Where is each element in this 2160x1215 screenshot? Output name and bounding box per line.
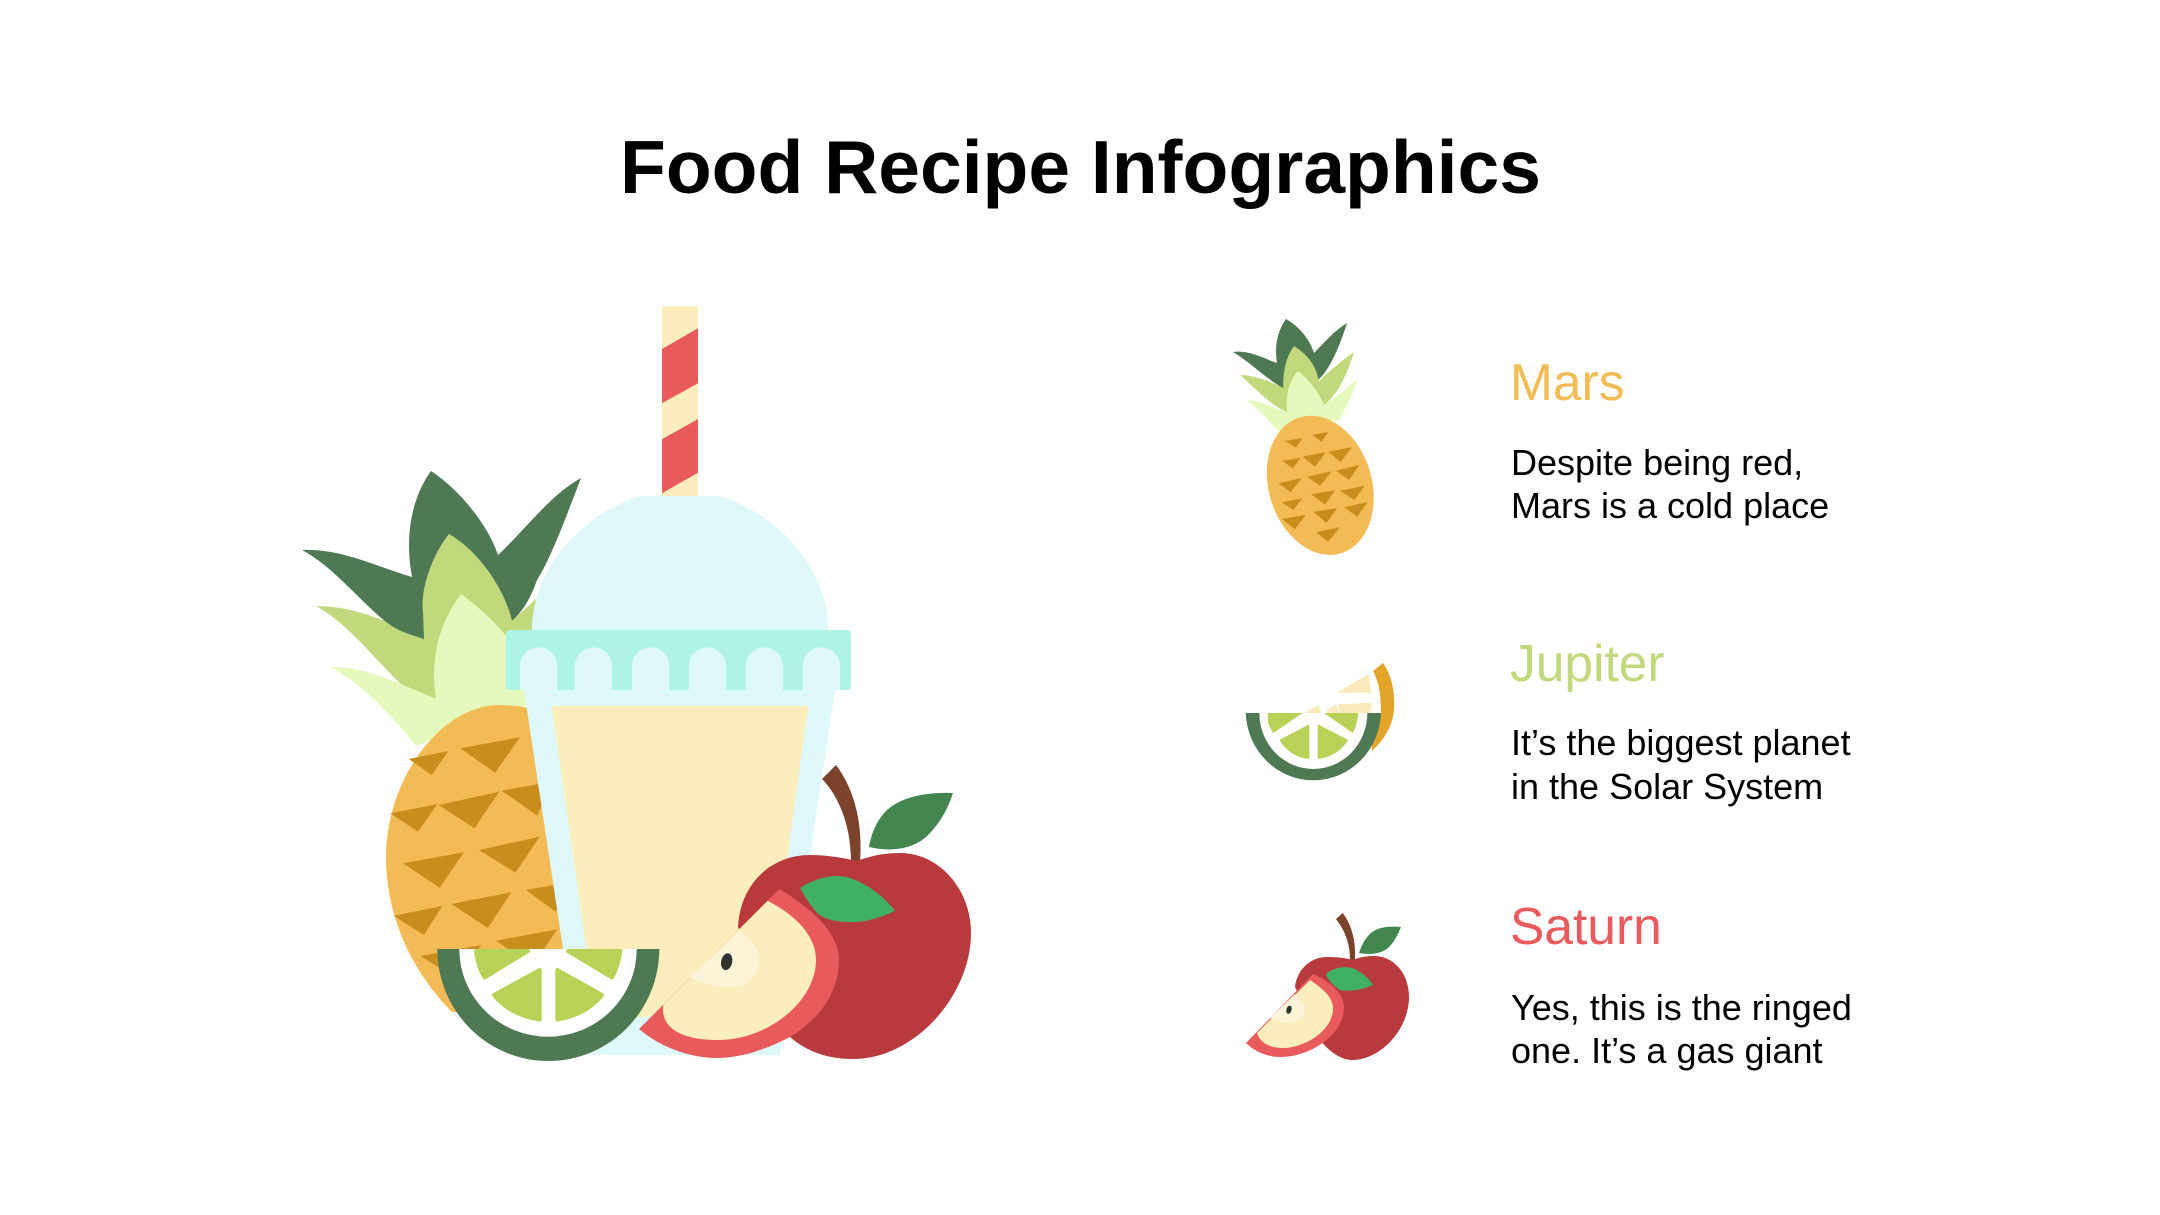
heading: Mars: Mars (1510, 353, 1624, 411)
icon: apple (1246, 913, 1409, 1060)
text: Saturn description: one. It’s a gas giant (1511, 1030, 1823, 1071)
heading: Jupiter: Jupiter (1510, 634, 1665, 692)
cup (524, 690, 835, 1055)
lime slice (437, 949, 659, 1061)
pineapple (302, 471, 600, 1012)
text: Mars description: Mars is a cold place (1511, 485, 1829, 526)
text: Saturn description: Yes, this is the ringed (1511, 987, 1852, 1028)
title: Food Recipe Infographics (620, 125, 1541, 209)
straw (662, 306, 698, 496)
apple (639, 765, 971, 1059)
icon: pineapple (1233, 319, 1390, 568)
icon: lime slice (1246, 663, 1394, 780)
heading: Saturn: Saturn (1510, 897, 1662, 955)
main illustration: smoothie with fruit (302, 306, 971, 1061)
text: Mars description: Despite being red, (1511, 442, 1803, 483)
text: Jupiter description: It’s the biggest planet (1511, 722, 1851, 763)
text: Jupiter description: in the Solar System (1511, 766, 1823, 807)
cup dome lid (532, 496, 828, 630)
lid rim with scallops (506, 630, 851, 690)
